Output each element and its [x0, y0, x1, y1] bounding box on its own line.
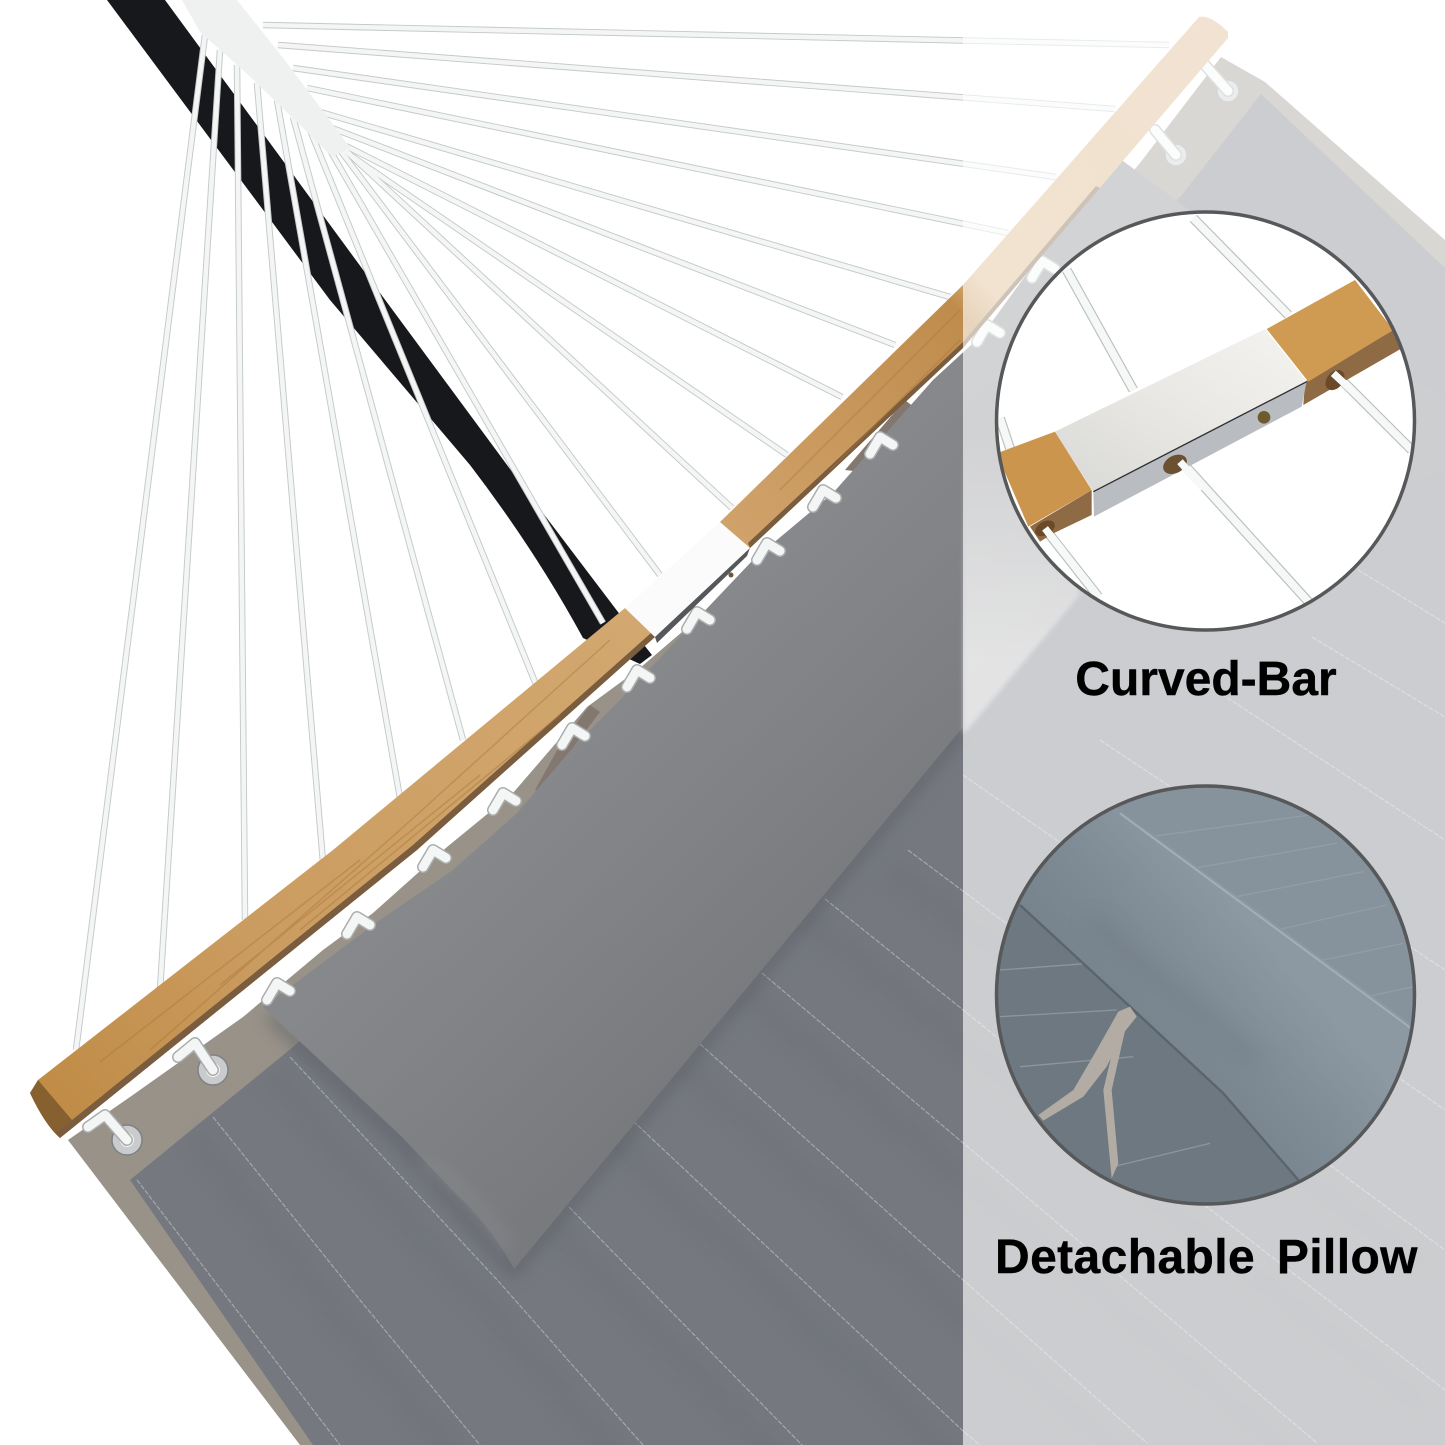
translucent white panel: [963, 0, 1445, 1445]
long pillow: [263, 155, 1445, 1269]
metal stand pole: [107, 0, 652, 664]
pillow straps: [535, 400, 915, 792]
callout circle: detachable pillow detail: [996, 786, 1423, 1213]
grommets: [112, 80, 1239, 1155]
heading: Detachable Pillow: Detachable Pillow: [995, 1231, 1418, 1284]
curved wooden spreader bar: [30, 17, 1228, 1138]
light on pillow end inside panel: [963, 430, 1100, 733]
heading: Curved-Bar: Curved-Bar: [1075, 653, 1337, 706]
pillow shadow: [270, 727, 963, 1269]
suspension ropes: [76, 25, 1169, 1050]
rope knots: [88, 65, 1228, 1140]
woven rope spreader knot: [182, 0, 350, 157]
callout circle: curved bar detail: [996, 212, 1414, 630]
